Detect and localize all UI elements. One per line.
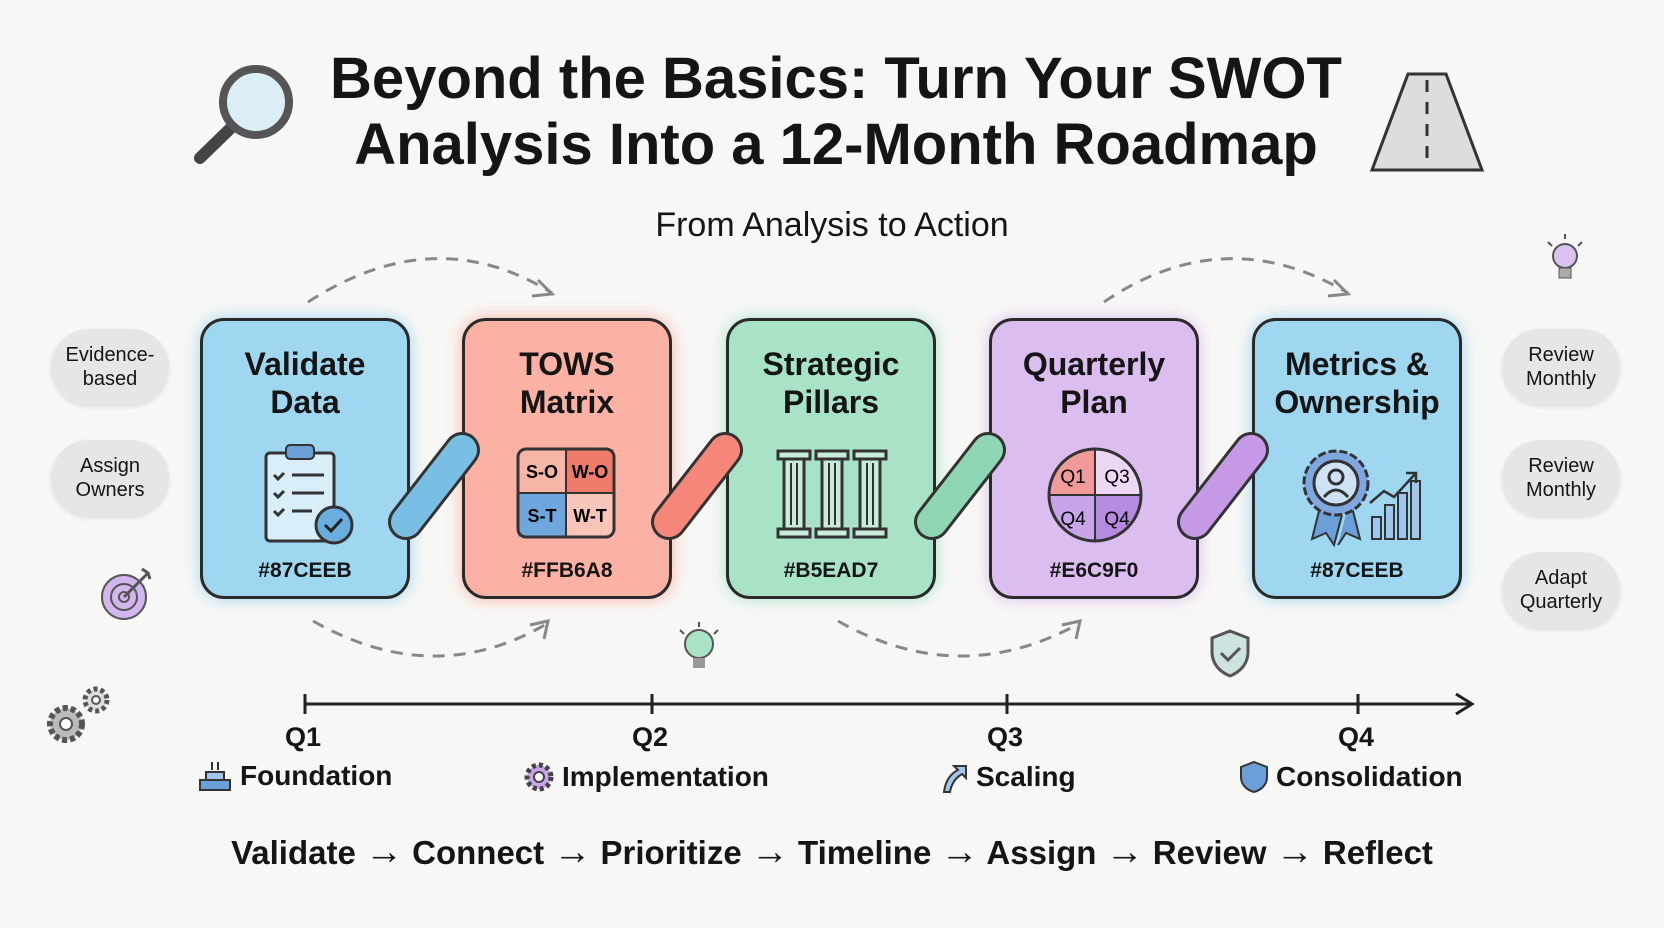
card: validate data: Validate (245, 346, 365, 382)
bubble: review monthly 1: Review (1528, 344, 1594, 366)
card: strategic pillars (726, 318, 936, 599)
bubble: adapt quarterly: Adapt (1535, 567, 1587, 589)
icon: quarter pie: Q1 (1060, 467, 1086, 488)
bubble: evidence-based (51, 329, 169, 405)
icon: quarter pie: Q4 (1104, 509, 1130, 530)
title: Beyond the Basics: Turn Your SWOT (330, 46, 1342, 111)
card: metrics & ownership (1252, 318, 1462, 599)
text: Q2 (632, 722, 668, 752)
card: TOWS matrix: #FFB6A8 (521, 559, 613, 582)
quarter labels: Q1 (285, 722, 321, 752)
text: Q4 (1338, 722, 1374, 752)
bubble: assign owners: Assign (80, 455, 140, 477)
bubble: review monthly 1: Monthly (1526, 368, 1596, 390)
card: metrics & ownership: #87CEEB (1310, 559, 1404, 582)
text: Q3 (987, 722, 1023, 752)
bubble: review monthly 2: Monthly (1526, 479, 1596, 501)
bubble: assign owners (51, 440, 169, 516)
card: quarterly plan: #E6C9F0 (1050, 559, 1138, 582)
card: TOWS matrix: TOWS (519, 346, 615, 382)
subtitle: From Analysis to Action (655, 206, 1009, 244)
icon: magnifier (194, 65, 293, 164)
icon: target (101, 568, 152, 620)
phase: scaling: Scaling (976, 761, 1076, 792)
bubble: review monthly 2: Review (1528, 455, 1594, 477)
card: TOWS matrix (462, 318, 672, 599)
icon: award and chart (1302, 450, 1421, 548)
icon: quarter pie (1048, 448, 1142, 542)
icon: shield small (1210, 629, 1250, 678)
icon: matrix: W-T (573, 506, 607, 526)
card: quarterly plan (989, 318, 1199, 599)
phase: implementation: Implementation (562, 761, 769, 792)
icon: matrix (516, 448, 616, 538)
bubble: evidence-based: based (83, 368, 137, 390)
icon: matrix: W-O (572, 462, 608, 482)
bubble: review monthly 1 (1502, 329, 1620, 405)
process flow text: Validate → Connect → Prioritize → Timeline → Assign → Review → Reflect (231, 831, 1433, 873)
phase: foundation: Foundation (240, 760, 392, 791)
card: validate data: Data (270, 384, 340, 420)
bubble: assign owners: Owners (76, 479, 144, 501)
bubble: evidence-based: Evidence- (66, 344, 154, 366)
icon: clipboard (264, 444, 354, 544)
icon: matrix: S-O (526, 462, 558, 482)
title: Analysis Into a 12-Month Roadmap (354, 112, 1318, 177)
card: metrics & ownership: Ownership (1274, 384, 1440, 420)
card: quarterly plan: Plan (1060, 384, 1128, 420)
icon: quarter pie: Q3 (1104, 467, 1130, 488)
title (330, 46, 1342, 177)
icon: gears (47, 686, 110, 743)
icon: lightbulb top right (1547, 234, 1583, 278)
card: validate data (200, 318, 410, 599)
bubble: adapt quarterly: Quarterly (1520, 591, 1602, 613)
bubble: review monthly 2 (1502, 440, 1620, 516)
phase: consolidation: Consolidation (1276, 761, 1463, 792)
card: quarterly plan: Quarterly (1023, 346, 1165, 382)
icon: pillars (776, 450, 888, 538)
card: validate data: #87CEEB (258, 559, 352, 582)
card: strategic pillars: Pillars (783, 384, 879, 420)
icon: quarter pie: Q4 (1060, 509, 1086, 530)
card: strategic pillars: Strategic (763, 346, 899, 382)
icon: matrix: S-T (528, 506, 556, 526)
card: TOWS matrix: Matrix (520, 384, 614, 420)
icon: small bulb (679, 622, 719, 668)
card: metrics & ownership: Metrics & (1285, 346, 1429, 382)
card: strategic pillars: #B5EAD7 (784, 559, 878, 582)
bubble: adapt quarterly (1502, 552, 1620, 628)
icon: road (1370, 72, 1484, 172)
